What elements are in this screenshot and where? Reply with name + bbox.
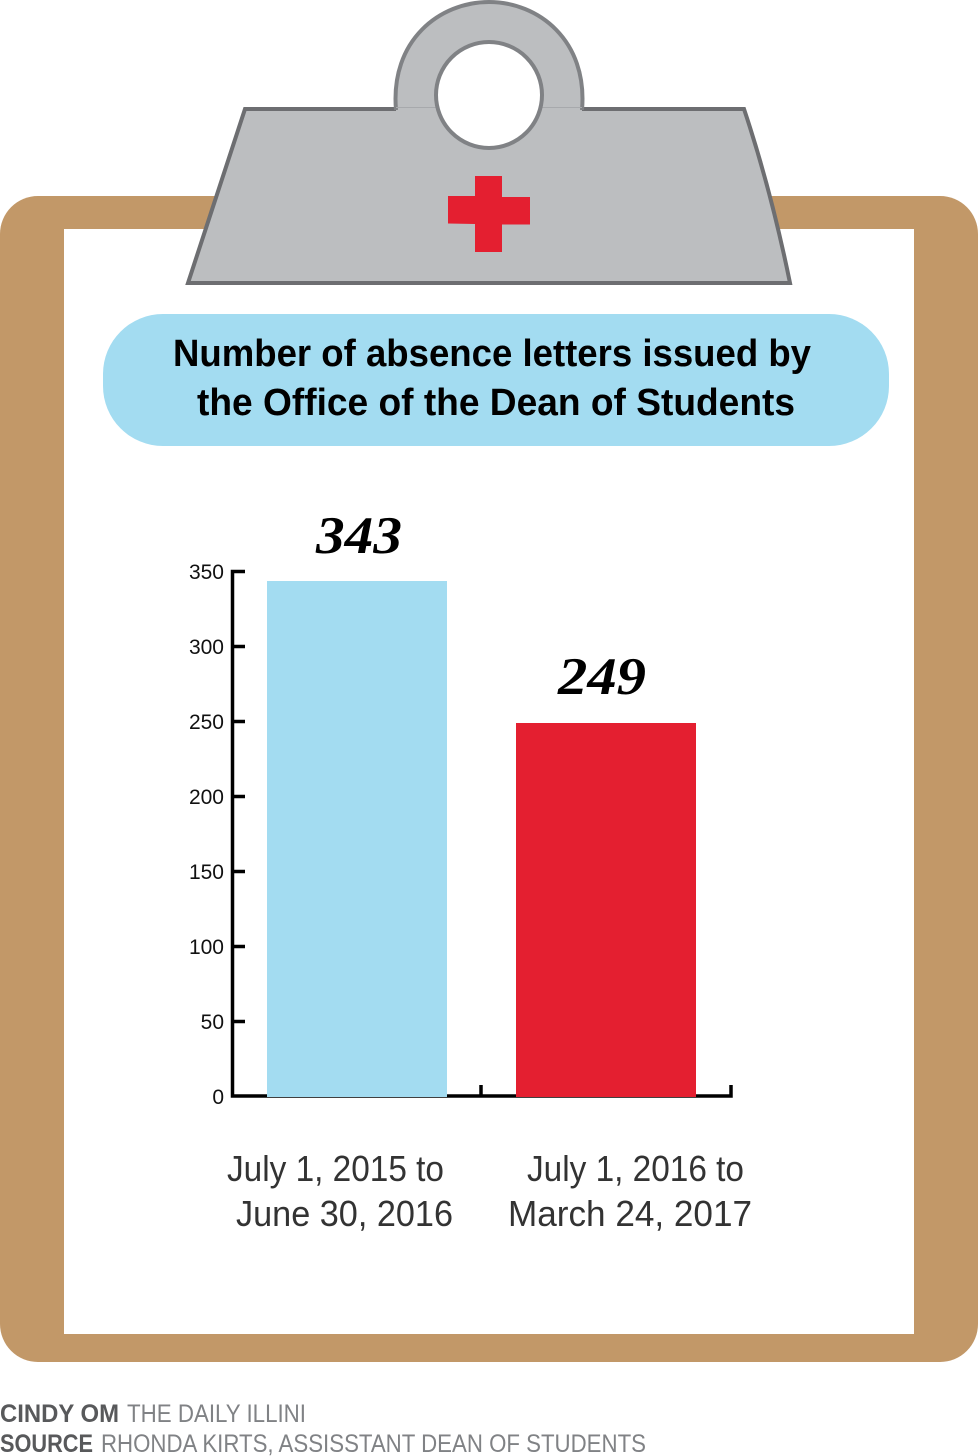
bar: 2016-17 bbox=[516, 723, 696, 1097]
x label: first period bbox=[227, 1148, 453, 1234]
value label: 249: 249 bbox=[557, 648, 646, 706]
credits: THE DAILY ILLINI bbox=[127, 1400, 306, 1428]
title banner: Number of absence letters issued by bbox=[173, 333, 811, 375]
x label: second period: March 24, 2017 bbox=[508, 1193, 752, 1234]
y-axis labels: 200 bbox=[189, 786, 224, 809]
bar chart bbox=[189, 507, 752, 1234]
clipboard clip with red cross bbox=[188, 2, 790, 283]
credits: CINDY OM bbox=[0, 1400, 119, 1428]
y-axis labels: 350 bbox=[189, 561, 224, 584]
title banner: the Office of the Dean of Students bbox=[197, 382, 795, 424]
value label: 343: 343 bbox=[315, 507, 402, 565]
x label: first period: June 30, 2016 bbox=[236, 1193, 453, 1234]
y-axis labels: 300 bbox=[189, 636, 224, 659]
y-axis labels: 50 bbox=[201, 1011, 224, 1034]
x label: second period: July 1, 2016 to bbox=[527, 1148, 744, 1189]
bar: 2015-16 bbox=[267, 581, 447, 1097]
chart axes bbox=[232, 572, 731, 1096]
y-axis labels: 0 bbox=[212, 1086, 224, 1109]
title banner bbox=[103, 314, 889, 446]
x label: second period bbox=[508, 1148, 752, 1234]
y-axis labels bbox=[189, 561, 224, 1109]
icon: red cross bbox=[448, 176, 530, 252]
y-axis labels: 100 bbox=[189, 936, 224, 959]
y-axis labels: 150 bbox=[189, 861, 224, 884]
x label: first period: July 1, 2015 to bbox=[227, 1148, 444, 1189]
y-axis labels: 250 bbox=[189, 711, 224, 734]
credits bbox=[0, 1400, 646, 1456]
